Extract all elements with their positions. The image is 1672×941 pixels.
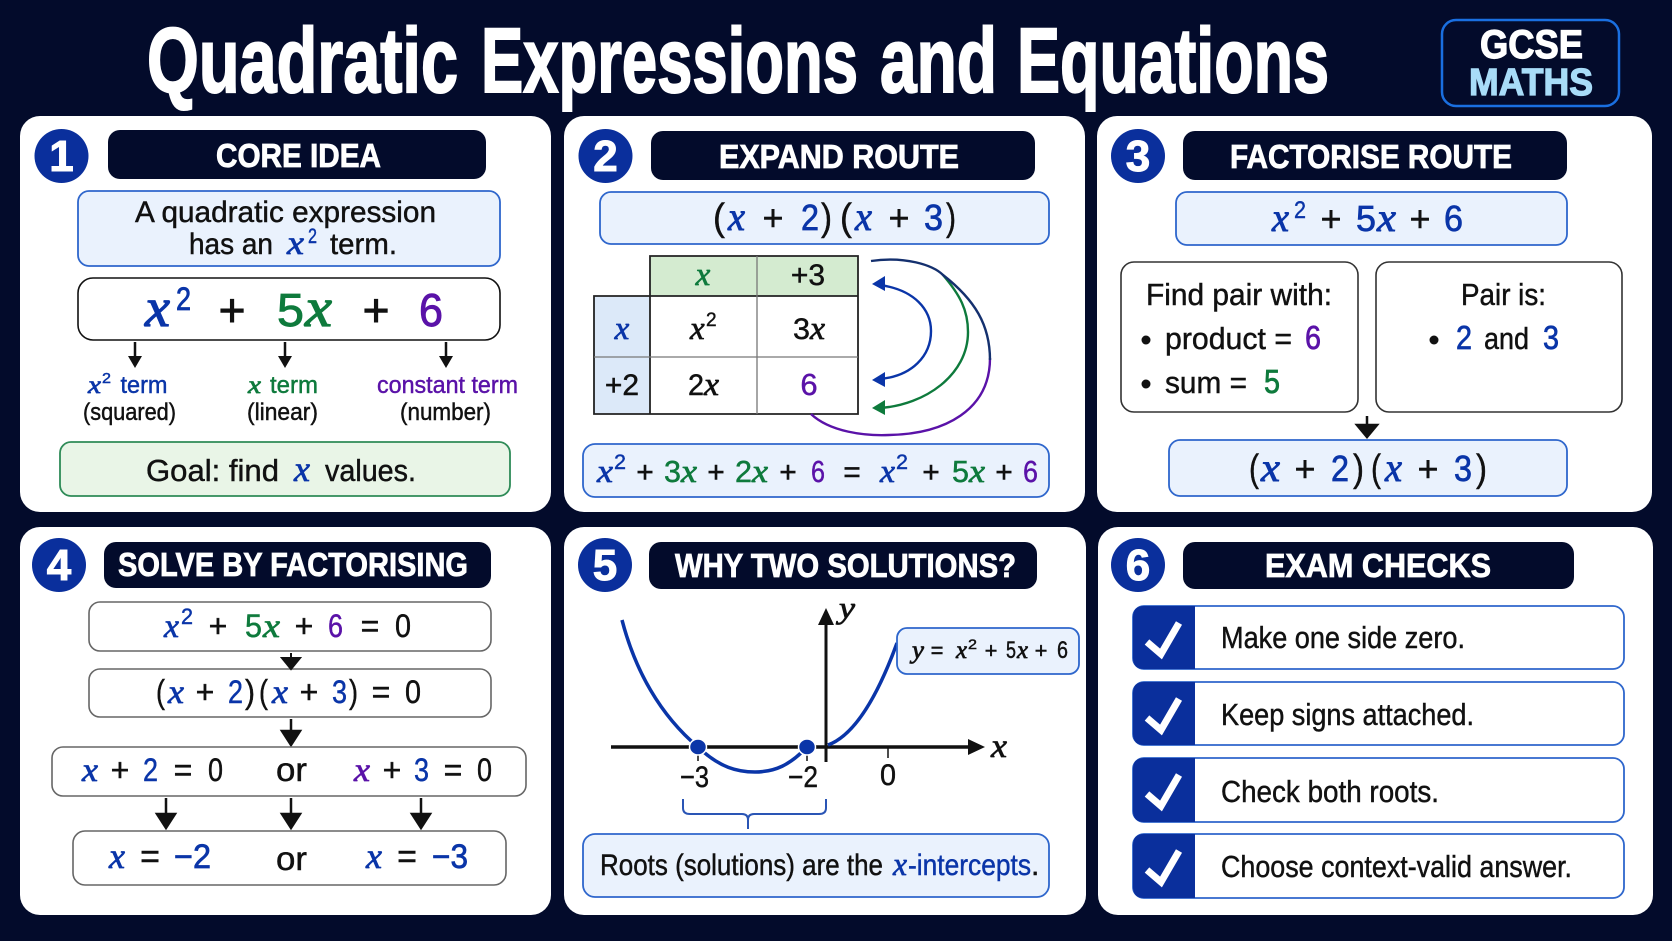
step 3 equations: x [353, 752, 370, 789]
heading: exam checks [1183, 542, 1574, 589]
pair result box: Pair is: [1461, 277, 1546, 312]
goal box: x [293, 449, 310, 489]
factored result box: x [1384, 445, 1402, 490]
panel 4: solve by factorising [20, 527, 551, 915]
grid multiplication table: 3 [793, 313, 810, 346]
step 1 equation: + [209, 608, 227, 644]
number badge 1 [34, 129, 88, 183]
step 1 equation: 0 [395, 608, 411, 644]
term label: x linear: term [270, 372, 318, 399]
panel 5: why two solutions [564, 527, 1086, 915]
arrows to term labels [128, 342, 453, 368]
pair result box: 2 [1456, 319, 1472, 356]
step 1 equation: 2 [181, 604, 193, 629]
step 1 equation: + [295, 608, 313, 644]
solutions: or [276, 840, 307, 877]
title: and [880, 10, 997, 112]
number badge 5: 5 [593, 541, 617, 590]
factored result box: 2 [1331, 448, 1349, 489]
expression box: + [1409, 198, 1431, 239]
parabola graph: y [836, 590, 855, 625]
grid multiplication table: 2 [688, 369, 704, 402]
term label: x linear: (linear) [247, 399, 318, 426]
expression box: x [304, 277, 333, 338]
check 3 [1133, 758, 1624, 822]
find pair box: sum = [1165, 365, 1247, 400]
expanded result box: x [968, 454, 985, 490]
heading: why two solutions: WHY TWO SOLUTIONS? [675, 547, 1016, 584]
number badge 2 [578, 129, 632, 183]
step 2 equation: + [300, 674, 318, 710]
equation label: 5 [1006, 637, 1016, 664]
definition box: has an [189, 228, 273, 261]
term label: x squared: term [120, 372, 168, 399]
step 2 equation: + [196, 674, 214, 710]
definition box: A quadratic expression [135, 196, 436, 229]
step 3 equations: = [174, 752, 192, 788]
factored expression box: 3 [924, 197, 943, 238]
factored expression box [600, 192, 1049, 244]
check 1 [1133, 606, 1624, 669]
solutions: x [365, 836, 382, 876]
grid multiplication table: +3 [791, 259, 825, 292]
solutions: = [397, 838, 417, 876]
factored result box: ( [1249, 448, 1259, 490]
badge: GCSE Maths: MATHS [1469, 62, 1593, 104]
expanded result box: 3 [664, 454, 681, 489]
grid multiplication table: x [689, 311, 705, 347]
grid multiplication table: +2 [605, 369, 639, 402]
goal box: Goal: find [146, 453, 279, 488]
grid multiplication table: 2 [706, 310, 717, 331]
find pair box: 6 [1305, 319, 1321, 356]
expression box [78, 277, 500, 340]
step 2 equation: ( [156, 673, 165, 710]
step 2 equation: = [372, 674, 390, 710]
expression box: 2 [176, 281, 191, 317]
factored result box: + [1294, 448, 1316, 489]
expression box [1176, 192, 1567, 245]
step 3 equations [52, 747, 526, 796]
equation label: 2 [968, 636, 977, 652]
step 2 equation: x [271, 674, 288, 711]
title [147, 10, 1329, 112]
brace [683, 799, 826, 829]
curved arrows [811, 260, 990, 435]
grid multiplication table: x [695, 257, 711, 293]
factored expression box: x [727, 194, 745, 239]
equation label: x [955, 637, 967, 664]
number badge 2: 2 [593, 132, 618, 181]
term label: constant: constant term [377, 372, 518, 399]
solutions: x [108, 836, 125, 876]
step 3 equations: 3 [414, 752, 429, 788]
grid multiplication table: 6 [800, 367, 818, 402]
factored result box: ) [1476, 448, 1487, 490]
number badge 4 [32, 538, 86, 592]
goal box: values. [325, 453, 416, 488]
definition box [78, 191, 500, 266]
roots note [583, 834, 1049, 897]
find pair box: 5 [1264, 363, 1280, 400]
find pair box: product = [1165, 321, 1292, 356]
heading: solve by factorising: SOLVE BY FACTORISING [118, 546, 468, 583]
badge: GCSE Maths [1442, 20, 1619, 106]
step 1 equation: x [163, 608, 179, 645]
factored expression box: ) [821, 197, 832, 239]
heading: exam checks: EXAM CHECKS [1265, 547, 1491, 584]
expression box: x [1271, 195, 1289, 240]
solutions: −3 [432, 838, 468, 876]
solutions: = [140, 838, 160, 876]
factored result box [1169, 440, 1567, 496]
factored expression box: 2 [801, 197, 819, 238]
heading: factorise route: FACTORISE ROUTE [1230, 138, 1512, 175]
factored result box: ( [1371, 448, 1381, 490]
equation label: + [985, 638, 997, 663]
parabola graph: 0 [880, 759, 896, 792]
factored result box: 3 [1454, 448, 1472, 489]
find pair box: Find pair with: [1146, 277, 1332, 312]
step 1 equation: 5 [245, 608, 262, 644]
expanded result box: 2 [896, 451, 908, 474]
expanded result box: + [922, 456, 940, 489]
arrows to solutions [157, 798, 430, 828]
expression box: + [1320, 198, 1342, 239]
panel 6: exam checks [1098, 527, 1653, 915]
heading: expand route: EXPAND ROUTE [719, 138, 959, 175]
check 1: Make one side zero. [1221, 620, 1465, 655]
expression box: 5 [1356, 198, 1376, 239]
parabola graph [611, 590, 1007, 794]
find pair box [1121, 262, 1358, 412]
step 2 equation: ) [245, 673, 255, 710]
equation label: y [909, 637, 925, 664]
pair result box [1376, 262, 1622, 412]
factored expression box: ( [840, 197, 852, 239]
expression box: + [363, 284, 389, 336]
equation label: x [1016, 637, 1028, 664]
term label: x linear: x [247, 372, 261, 399]
grid multiplication table: x [614, 311, 630, 347]
number badge 1: 1 [49, 132, 74, 181]
number badge 5 [578, 538, 632, 592]
title: Quadratic [147, 10, 458, 112]
step 1 equation: x [262, 608, 280, 645]
parabola graph: −2 [788, 761, 818, 794]
solutions [73, 831, 506, 885]
expression box: 2 [1294, 197, 1306, 224]
expanded result box [583, 444, 1049, 497]
expanded result box: 6 [811, 454, 825, 489]
step 3 equations: or [276, 751, 307, 788]
factored expression box: x [854, 194, 872, 239]
parabola graph: x [990, 728, 1007, 765]
definition box: term. [330, 228, 397, 261]
equation label: = [931, 638, 943, 663]
expanded result box: + [707, 456, 725, 489]
expanded result box: x [751, 454, 768, 490]
parabola graph: −3 [680, 761, 709, 794]
check 4: Choose context-valid answer. [1221, 849, 1572, 884]
step 3 equations: x [81, 752, 98, 789]
step 1 equation: = [361, 608, 379, 644]
term label: x squared: (squared) [83, 399, 176, 426]
goal box [60, 442, 510, 496]
expanded result box: x [596, 454, 613, 490]
expression box: 5 [277, 284, 304, 336]
factored result box: ) [1353, 448, 1364, 490]
definition box: 2 [308, 225, 317, 248]
term label: constant [377, 372, 518, 426]
expanded result box: 2 [735, 454, 752, 489]
arrow down [1357, 416, 1377, 437]
step 3 equations: 0 [477, 752, 492, 788]
heading: core idea: CORE IDEA [216, 137, 381, 174]
heading: core idea [108, 130, 486, 179]
number badge 6: 6 [1126, 541, 1150, 590]
definition box: x [286, 225, 304, 262]
step 2 equation: 2 [228, 674, 243, 710]
term label: x linear [247, 372, 318, 426]
check 2 [1133, 682, 1624, 745]
expanded result box: 2 [614, 451, 626, 474]
expression box: + [219, 284, 245, 336]
factored expression box: ( [713, 197, 725, 239]
heading: expand route [651, 131, 1035, 180]
term label: x squared: 2 [102, 370, 111, 387]
step 2 equation: 0 [405, 674, 421, 710]
factored expression box: ) [946, 197, 956, 239]
badge: GCSE Maths: GCSE [1480, 23, 1583, 67]
expanded result box: x [680, 454, 697, 490]
number badge 3: 3 [1126, 132, 1150, 181]
step 3 equations: = [444, 752, 462, 788]
step 3 equations: + [111, 752, 129, 788]
step 2 equation: 3 [332, 674, 347, 710]
equation label: 6 [1057, 637, 1068, 664]
roots note: -intercepts [908, 849, 1031, 882]
factored result box: + [1417, 448, 1439, 489]
check 2: Keep signs attached. [1221, 697, 1474, 732]
panel 3: factorise route [1097, 116, 1652, 512]
step 2 equation: ( [259, 673, 268, 710]
number badge 6 [1111, 538, 1165, 592]
arrow between steps 1 and 2 [282, 653, 300, 669]
step 1 equation: 6 [328, 608, 343, 644]
title: Equations [1017, 10, 1329, 112]
expression box: x [144, 277, 171, 338]
step 2 equation: ) [349, 673, 358, 710]
pair result box: and [1484, 321, 1529, 356]
check 4 [1133, 834, 1624, 898]
roots note: x [892, 847, 907, 883]
expression box: 6 [419, 284, 443, 336]
expanded result box: + [779, 456, 797, 489]
step 1 equation [89, 602, 491, 651]
factored result box: x [1260, 445, 1280, 490]
panel 2: expand route [564, 116, 1085, 512]
term label: x squared: x [87, 372, 101, 399]
solutions: −2 [174, 838, 211, 876]
expression box: x [1376, 195, 1396, 240]
expanded result box: 6 [1023, 454, 1038, 489]
number badge 3 [1111, 129, 1165, 183]
term label: x squared [83, 370, 176, 426]
grid multiplication table: x [809, 311, 825, 347]
pair result box: 3 [1543, 319, 1559, 356]
step 2 equation [89, 669, 491, 717]
step 3 equations: 0 [208, 752, 223, 788]
check 3: Check both roots. [1221, 774, 1439, 809]
expression box: 6 [1444, 198, 1463, 239]
grid multiplication table: x [703, 367, 719, 403]
factored expression box: + [888, 197, 910, 238]
number badge 4: 4 [47, 541, 72, 590]
grid multiplication table [594, 256, 858, 414]
step 3 equations: + [383, 752, 401, 788]
factored expression box: + [762, 197, 784, 238]
equation label: + [1035, 638, 1047, 663]
expanded result box: = [843, 456, 861, 489]
heading: factorise route [1183, 131, 1567, 180]
expanded result box: + [995, 456, 1013, 489]
expanded result box: + [636, 456, 654, 489]
step 3 equations: 2 [143, 752, 158, 788]
expanded result box: x [879, 454, 895, 490]
arrow [282, 719, 300, 745]
step 2 equation: x [167, 674, 184, 711]
expanded result box: 5 [952, 454, 969, 489]
title: Expressions [481, 10, 858, 112]
roots note: . [1031, 849, 1039, 882]
equation label [897, 628, 1079, 674]
panel 1: core idea [20, 116, 551, 512]
roots note: Roots (solutions) are the [600, 849, 883, 882]
term label: constant: (number) [400, 399, 491, 426]
